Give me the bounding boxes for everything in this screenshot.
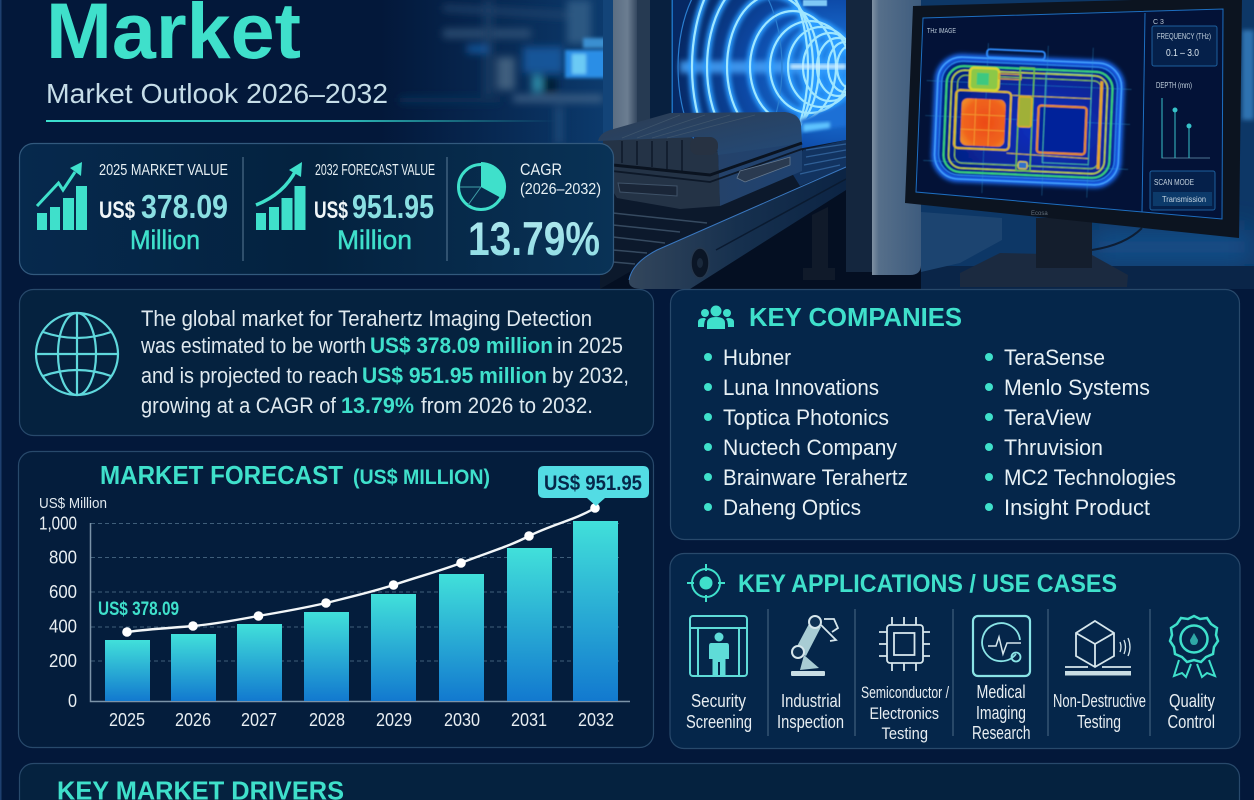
panel: key companies bbox=[670, 290, 1240, 540]
stat: 2032 forecast value: Million bbox=[337, 225, 412, 255]
y axis labels: 400 bbox=[49, 616, 77, 636]
application: industrial inspection: Industrial bbox=[781, 691, 841, 711]
y axis labels: 800 bbox=[49, 548, 77, 568]
subtitle: Market Outlook 2026–2032 bbox=[46, 78, 388, 109]
application: medical imaging research: Medical bbox=[976, 682, 1026, 702]
company list, right column: TeraSense bbox=[1004, 345, 1105, 370]
stat: 2025 market value: Million bbox=[130, 225, 200, 255]
panel: market forecast chart bbox=[18, 452, 654, 748]
icon: rising bars with curved arrow bbox=[256, 162, 306, 230]
scanner central tower bbox=[846, 0, 1002, 275]
callout: 2032 value: US$ 951.95 bbox=[544, 472, 642, 495]
thermal suitcase scan bbox=[922, 41, 1133, 199]
title block bbox=[46, 0, 556, 122]
application: medical imaging research: Imaging bbox=[976, 703, 1026, 723]
y axis labels: 600 bbox=[49, 582, 77, 602]
icon: target bbox=[687, 564, 725, 602]
application: quality control: Quality bbox=[1169, 691, 1215, 711]
stat: 2025 market value bbox=[37, 162, 228, 255]
company list, right column: TeraView bbox=[1004, 405, 1091, 430]
readout: frequency: FREQUENCY (THz) bbox=[1157, 32, 1211, 41]
panel: market summary bbox=[20, 290, 654, 436]
summary text: and is projected to reach bbox=[141, 363, 358, 388]
scanner left frame bbox=[603, 0, 673, 144]
application: medical imaging research: Research bbox=[972, 723, 1030, 743]
icon: people group bbox=[698, 306, 734, 329]
grid lines bbox=[91, 524, 619, 661]
heading: (US$ MILLION) bbox=[353, 466, 490, 489]
company list, left column: Daheng Optics bbox=[723, 495, 861, 520]
stat: 2032 forecast value: 951.95 bbox=[352, 188, 434, 225]
stat: 2025 market value: 378.09 bbox=[141, 188, 228, 225]
company list, right column bbox=[985, 345, 1176, 520]
icon: rising bars with zigzag arrow bbox=[37, 162, 87, 230]
heading: KEY COMPANIES bbox=[749, 302, 962, 332]
company list, right column: Insight Product bbox=[1004, 495, 1150, 520]
application: non-destructive testing bbox=[1053, 621, 1146, 732]
panel: key applications bbox=[670, 554, 1240, 748]
application: industrial inspection bbox=[777, 616, 844, 732]
x axis labels: 2026 bbox=[175, 710, 211, 730]
company list, left column: Nuctech Company bbox=[723, 435, 897, 460]
stat: 2025 market value: US$ bbox=[99, 197, 136, 224]
scan image title: THz IMAGE bbox=[927, 26, 956, 35]
readout: scan mode bbox=[1150, 171, 1215, 210]
y axis labels: 200 bbox=[49, 651, 77, 671]
stat: 2032 forecast value: US$ bbox=[314, 197, 348, 224]
stat: 2032 forecast value bbox=[256, 162, 435, 255]
application: security screening bbox=[686, 616, 752, 732]
application: security screening: Security bbox=[691, 691, 746, 711]
conveyor side rail bbox=[629, 167, 846, 289]
conveyor belt bbox=[600, 140, 846, 289]
company list, left column bbox=[704, 345, 908, 520]
hero image: terahertz baggage scanner bbox=[380, 0, 1254, 289]
monitor stand bbox=[960, 218, 1142, 287]
icon: cube with waves bbox=[1065, 621, 1131, 676]
x axis labels: 2025 bbox=[109, 710, 145, 730]
stat: CAGR: 13.79% bbox=[468, 212, 600, 265]
bars bbox=[105, 521, 618, 701]
panel: key market drivers bbox=[20, 764, 1240, 800]
stat: 2032 forecast value: 2032 FORECAST VALUE bbox=[315, 162, 435, 179]
application: semiconductor testing bbox=[861, 617, 949, 743]
y axis labels: 1,000 bbox=[39, 514, 77, 534]
callout: 2032 value bbox=[538, 466, 649, 506]
axis unit: US$ Million bbox=[39, 496, 107, 512]
readout: frequency bbox=[1152, 26, 1217, 66]
summary text: US$ 951.95 million bbox=[362, 363, 547, 388]
application: security screening: Screening bbox=[686, 712, 752, 732]
application: industrial inspection: Inspection bbox=[777, 712, 844, 732]
application: non-destructive testing: Testing bbox=[1077, 712, 1121, 732]
heading: MARKET FORECAST bbox=[100, 460, 343, 490]
y axis labels: 0 bbox=[68, 691, 77, 711]
summary text: was estimated to be worth bbox=[140, 333, 366, 358]
summary text: from 2026 to 2032. bbox=[421, 393, 593, 418]
heading bbox=[100, 460, 490, 490]
x axis labels bbox=[109, 710, 614, 730]
x axis labels: 2027 bbox=[241, 710, 277, 730]
application: non-destructive testing: Non-Destructive bbox=[1053, 691, 1146, 711]
summary text: growing at a CAGR of bbox=[141, 393, 337, 418]
company list, left column: Luna Innovations bbox=[723, 375, 879, 400]
x axis labels: 2032 bbox=[578, 710, 614, 730]
x axis labels: 2028 bbox=[309, 710, 345, 730]
blurred laboratory backdrop bbox=[380, 0, 1254, 289]
application: quality control bbox=[1168, 616, 1218, 732]
company list, left column: Hubner bbox=[723, 345, 791, 370]
company list, right column: MC2 Technologies bbox=[1004, 465, 1176, 490]
company list, right column: Menlo Systems bbox=[1004, 375, 1150, 400]
stat: 2025 market value: 2025 MARKET VALUE bbox=[99, 162, 228, 179]
application: medical imaging research bbox=[972, 616, 1030, 743]
y axis labels bbox=[39, 514, 77, 711]
icon: chip bbox=[879, 617, 930, 671]
summary text: by 2032, bbox=[552, 363, 629, 388]
readout: window label: C 3 bbox=[1153, 19, 1164, 26]
stat: CAGR bbox=[458, 160, 601, 265]
heading: KEY APPLICATIONS / USE CASES bbox=[738, 570, 1117, 598]
suitcase on the conveyor bbox=[598, 112, 802, 209]
x axis labels: 2031 bbox=[511, 710, 547, 730]
screen side panel divider bbox=[1142, 13, 1145, 212]
summary text: The global market for Terahertz Imaging Detection bbox=[141, 306, 592, 331]
readout: frequency: 0.1 – 3.0 bbox=[1166, 48, 1199, 59]
application: semiconductor testing: Semiconductor / bbox=[861, 683, 949, 702]
icon: body scanner gate bbox=[690, 616, 747, 677]
axes bbox=[90, 523, 630, 702]
summary text: 13.79% bbox=[341, 393, 414, 418]
readout: depth chart bbox=[1156, 81, 1210, 158]
x axis labels: 2030 bbox=[444, 710, 480, 730]
icon: pie chart bbox=[458, 162, 506, 210]
callout: 2025 value: US$ 378.09 bbox=[98, 599, 179, 620]
icon: globe bbox=[36, 313, 118, 395]
company list, left column: Toptica Photonics bbox=[723, 405, 889, 430]
readout: scan mode: Transmission bbox=[1162, 195, 1206, 204]
monitor with terahertz scan bbox=[905, 0, 1242, 238]
monitor brand: Ecosa bbox=[1031, 211, 1048, 217]
icon: award rosette bbox=[1170, 616, 1218, 677]
conveyor leg bbox=[803, 207, 835, 280]
summary text bbox=[140, 306, 629, 418]
scanner tunnel with terahertz waves bbox=[673, 0, 846, 148]
readout: depth chart: DEPTH (mm) bbox=[1156, 81, 1192, 90]
company list, left column: Brainware Terahertz bbox=[723, 465, 908, 490]
icon: pulse scan bbox=[973, 616, 1030, 676]
trend line bbox=[122, 503, 600, 637]
summary text: in 2025 bbox=[557, 333, 623, 358]
roller bbox=[691, 248, 709, 278]
application: semiconductor testing: Testing bbox=[882, 724, 928, 743]
company list, right column: Thruvision bbox=[1004, 435, 1103, 460]
stat: CAGR: (2026–2032) bbox=[520, 181, 601, 198]
x axis labels: 2029 bbox=[376, 710, 412, 730]
panel: headline statistics bbox=[20, 144, 614, 274]
application: semiconductor testing: Electronics bbox=[870, 704, 939, 723]
application: quality control: Control bbox=[1168, 712, 1215, 732]
icon: robot arm bbox=[791, 616, 838, 676]
readout: scan mode: SCAN MODE bbox=[1154, 178, 1194, 187]
summary text: US$ 378.09 million bbox=[370, 333, 553, 358]
stat: CAGR: CAGR bbox=[520, 160, 562, 179]
